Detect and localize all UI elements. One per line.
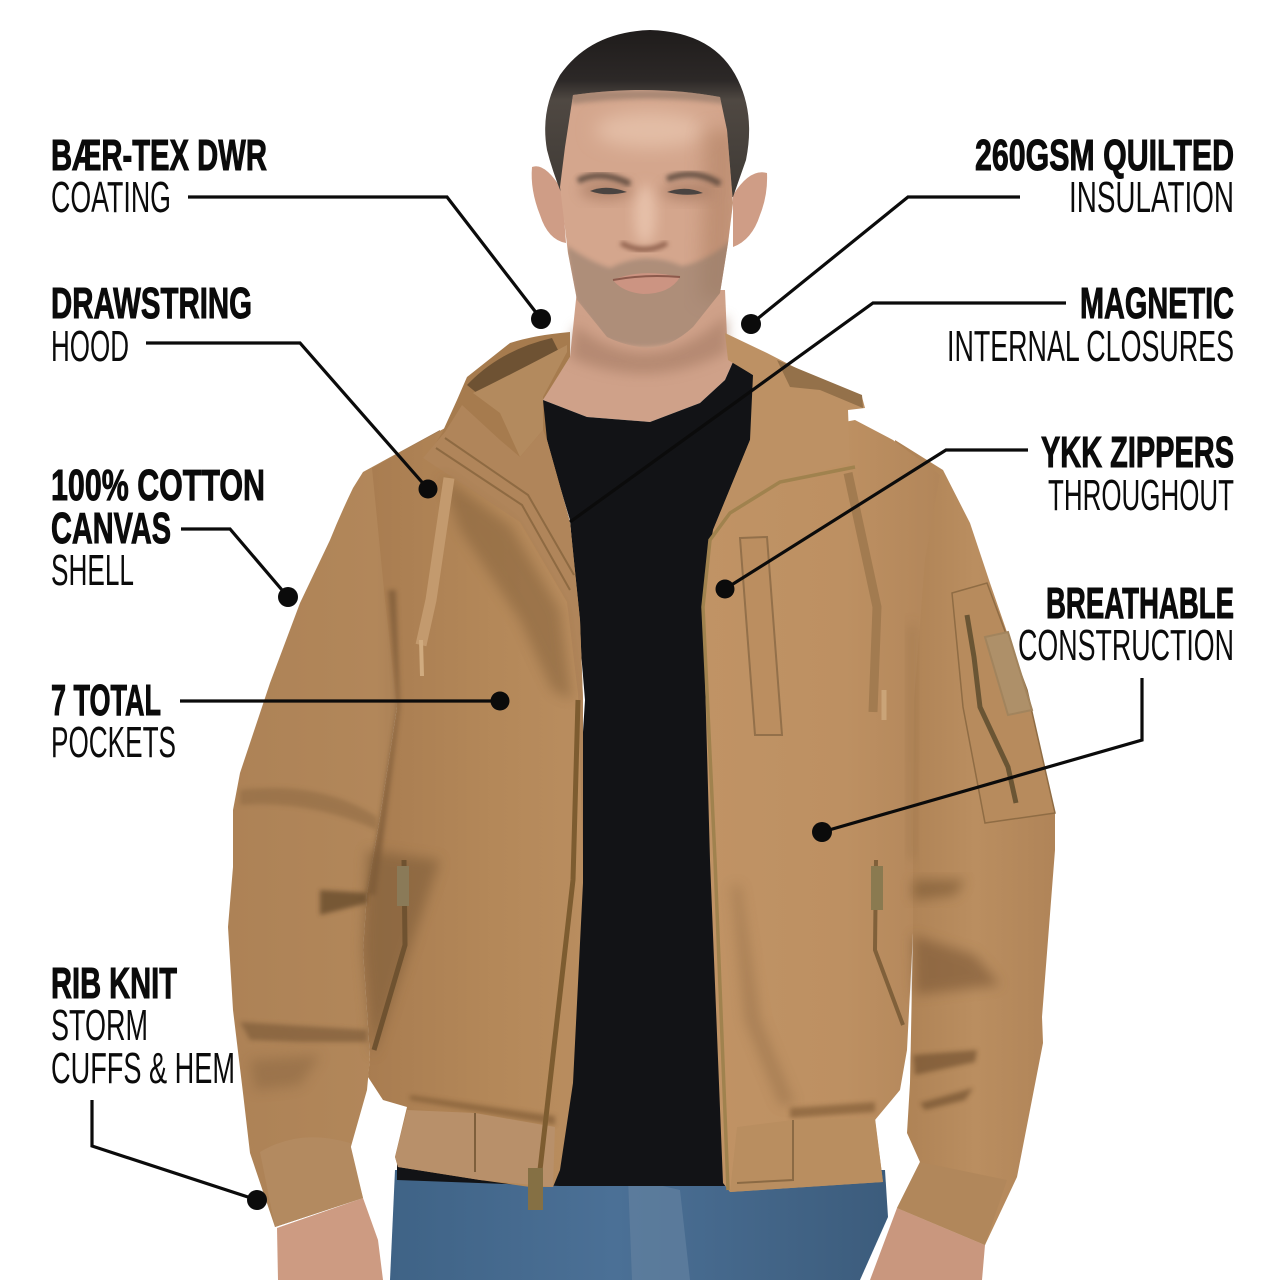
left sleeve fold low — [240, 1022, 367, 1042]
marker dot — [531, 309, 551, 329]
heading: RIB KNIT — [51, 959, 177, 1008]
left pocket pull — [397, 866, 409, 906]
hood left lining shadow — [467, 338, 558, 412]
heading: BÆR-TEX DWR — [51, 131, 267, 180]
left collar stitching — [436, 438, 574, 590]
body sleeve crease right — [908, 625, 916, 860]
lips — [613, 273, 680, 294]
right ear — [733, 172, 767, 247]
jeans — [390, 1170, 888, 1280]
leader line — [725, 450, 1028, 589]
right front zipper — [703, 467, 855, 1190]
marker dot — [490, 692, 510, 710]
hood right drawcord trim — [777, 360, 863, 408]
left sleeve fold middle — [320, 890, 367, 915]
right sleeve fold top — [913, 880, 965, 900]
stubble — [566, 240, 732, 347]
right pocket pull — [871, 866, 883, 910]
left ear — [532, 166, 566, 243]
heading second line: CANVAS — [51, 504, 171, 553]
chest pocket — [740, 537, 782, 735]
right drawstring tip — [882, 690, 886, 720]
jacket left sleeve — [228, 430, 440, 1227]
heading: 7 TOTAL — [51, 676, 161, 725]
subheading: STORM — [51, 1001, 148, 1050]
right eyebrow — [667, 175, 720, 184]
hood left outer — [427, 332, 570, 522]
figure: man wearing jacket — [228, 30, 1055, 1280]
left hand — [277, 1198, 383, 1280]
left drawstring — [421, 478, 449, 645]
callout: 260gsm quilted insulation — [741, 131, 1234, 334]
callout: YKK zippers throughout — [716, 428, 1234, 598]
subheading: POCKETS — [51, 718, 176, 767]
jacket right sleeve — [895, 440, 1055, 1245]
marker dot — [716, 580, 734, 598]
left sleeve fold cuff — [250, 1055, 320, 1090]
leader line — [751, 197, 1020, 324]
jacket shading — [240, 475, 1000, 1125]
left sleeve fold upper — [240, 788, 377, 830]
callout: breathable construction — [812, 579, 1234, 842]
sleeve pocket — [952, 583, 1055, 823]
right hand — [870, 1208, 985, 1280]
marker dot — [812, 822, 832, 842]
left hand pocket zipper — [374, 860, 405, 1050]
forehead highlight — [595, 112, 705, 148]
left eye — [590, 188, 627, 194]
mouth line — [613, 276, 680, 280]
subheading: HOOD — [51, 322, 129, 371]
leader line — [180, 699, 500, 703]
underarm crease left — [366, 590, 400, 895]
left hem band — [395, 1110, 555, 1187]
black t-shirt — [397, 362, 760, 1186]
marker dot — [741, 314, 761, 334]
face — [560, 90, 733, 348]
sleeve zipper — [967, 615, 1016, 803]
eye socket shadow right — [662, 181, 714, 201]
left zipper pull — [528, 1168, 543, 1210]
subheading: COATING — [51, 173, 171, 222]
callout: rib knit storm cuffs and hem — [51, 959, 267, 1210]
leader line — [188, 197, 541, 319]
hood right outer — [713, 333, 865, 530]
collar cast shadow — [450, 482, 574, 698]
leader line — [570, 303, 1066, 522]
marker dot — [278, 587, 298, 607]
marker dot — [247, 1190, 267, 1210]
right sleeve fold upper middle — [913, 935, 1000, 995]
head — [532, 30, 767, 348]
callout: drawstring hood — [51, 279, 438, 498]
callout: cotton canvas shell — [51, 461, 298, 607]
hairline stubble shade — [565, 90, 725, 104]
right body fold — [732, 885, 795, 1105]
right sleeve fold bottom — [920, 1088, 973, 1110]
left eyebrow — [578, 176, 630, 184]
nose highlight — [634, 185, 656, 245]
left collar placket — [423, 405, 583, 860]
right drawstring — [848, 473, 877, 712]
neck — [543, 290, 733, 422]
subheading: SHELL — [51, 546, 134, 595]
callout: Baer-Tex DWR coating — [51, 131, 551, 329]
jacket right body — [703, 420, 940, 1192]
leader line — [181, 529, 288, 597]
callout: magnetic internal closures — [570, 279, 1234, 522]
right hem band — [730, 1118, 883, 1192]
hair — [545, 30, 749, 197]
right rib knit cuff — [897, 1162, 1007, 1245]
left hem seam — [474, 1113, 476, 1172]
hem gather shadow — [410, 1095, 875, 1125]
callout: 7 total pockets — [51, 676, 510, 767]
right hand pocket zipper — [875, 860, 903, 1025]
eye socket shadow left — [580, 180, 632, 200]
sleeve patch — [985, 632, 1032, 715]
right sleeve fold lower — [913, 1050, 977, 1075]
leader line — [146, 343, 428, 489]
subheading second line: CUFFS & HEM — [51, 1044, 235, 1093]
right cheek shadow — [700, 130, 740, 300]
heading: 100% COTTON — [51, 461, 265, 510]
leader line — [822, 678, 1142, 832]
neck shadow — [570, 315, 727, 374]
hood left inner panel — [473, 345, 567, 457]
heading: DRAWSTRING — [51, 279, 252, 328]
leader line — [92, 1100, 257, 1200]
nose underside — [621, 243, 667, 250]
left front zipper — [540, 700, 578, 1170]
marker dot — [418, 480, 438, 498]
left pocket shadow panel — [363, 850, 440, 1057]
jeans fly detail — [628, 1178, 690, 1280]
jacket left body — [363, 428, 583, 1187]
left drawstring tip — [421, 640, 422, 676]
face shading — [565, 90, 740, 347]
right hem seam — [737, 1120, 793, 1183]
left rib knit cuff — [260, 1137, 363, 1227]
right eye — [667, 189, 703, 195]
